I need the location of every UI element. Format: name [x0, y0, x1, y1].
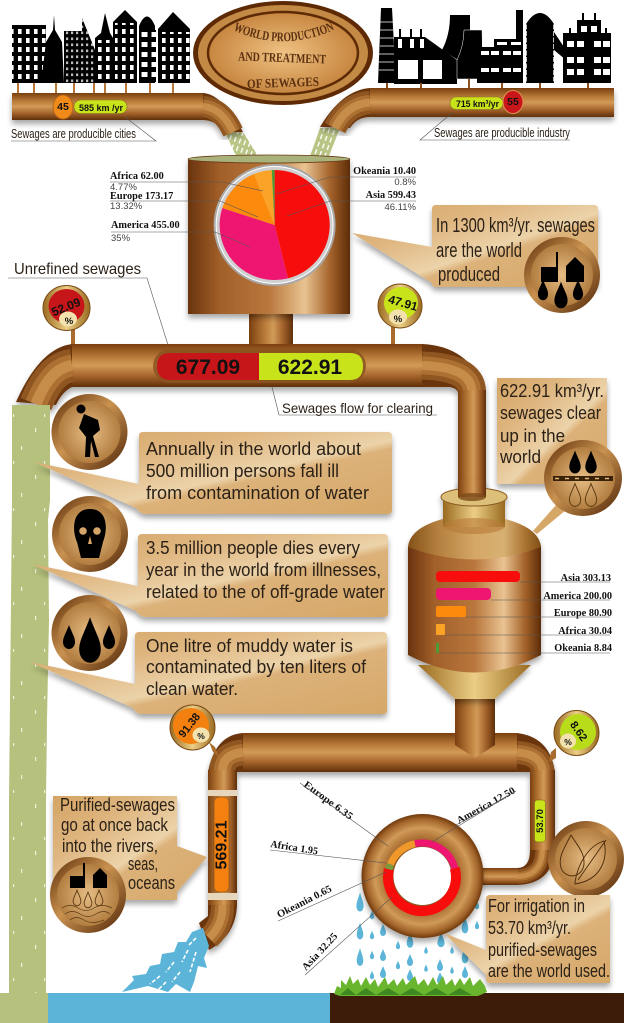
pie labels: left: America 455.00 [111, 220, 180, 231]
sewage streams into tank [225, 128, 340, 156]
flow readout: 622.91 [278, 356, 342, 379]
pie labels: left: Africa 62.00 [110, 171, 164, 182]
badge: industry share: 55 [507, 96, 519, 108]
caption: flow for clearing [272, 387, 437, 416]
badge: industry share: 715 km³/yr [456, 99, 499, 110]
bar labels: Okeania 8.84 [554, 643, 612, 654]
callout: purified sewages: seas, [128, 853, 158, 874]
badge: cities share: 45 [57, 101, 69, 113]
icon: skull [52, 496, 128, 572]
pie labels: left [110, 171, 263, 247]
callout: muddy water: contaminated by ten liters of [146, 656, 367, 677]
grass [334, 976, 487, 996]
tank with pie chart [188, 155, 350, 314]
pipe: industry sewage [320, 88, 614, 128]
bar labels: Africa 30.04 [558, 626, 612, 637]
main pipe [16, 344, 486, 497]
pie labels: left: 13.32% [110, 201, 143, 212]
gauge: 91.38 percent: 91.38 [177, 711, 203, 740]
caption: industry [420, 112, 570, 140]
pie labels: right: 46.11% [384, 202, 417, 213]
callout: illness [34, 432, 392, 514]
ring labels: America 12.50 [455, 785, 517, 827]
caption: flow for clearing: Sewages flow for clearing [282, 400, 433, 416]
ring labels: Europe 6.35 [301, 780, 355, 823]
ring labels: Asia 32.25 [300, 931, 340, 973]
callout: 622.91 km3: up in the [500, 425, 565, 446]
title badge [193, 1, 373, 105]
badge: 53.70: 53.70 [535, 809, 546, 833]
gauge: 47.91 percent: 47.91 [387, 292, 420, 314]
callout: purified sewages: oceans [128, 872, 175, 893]
callout: 1300 km3: produced [438, 264, 500, 286]
caption: industry: Sewages are producible industry [434, 125, 570, 140]
badge: industry share [450, 90, 523, 114]
gauge: 47.91 percent: % [394, 314, 403, 325]
callout: muddy water [30, 632, 387, 714]
callout: irrigation: 53.70 km³/yr. [488, 917, 571, 938]
bar chart [436, 571, 520, 653]
lower pipes [199, 733, 555, 950]
ring labels: Okeania 0.65 [275, 884, 334, 921]
callout: muddy water: One litre of muddy water is [146, 635, 353, 656]
icon: filter drops [533, 440, 622, 534]
bar labels: Asia 303.13 [561, 573, 611, 584]
callout: muddy water: clean water. [146, 678, 238, 699]
water drops [356, 892, 479, 984]
badge: 569.21 [208, 790, 237, 900]
flow readout [153, 349, 366, 383]
title text: AND TREATMENT [238, 48, 327, 67]
callout: illness: from contamination of water [146, 482, 369, 503]
pie labels: right: Okeania 10.40 [353, 166, 416, 177]
callout: 1300 km3: are the world [436, 240, 522, 262]
filter vessel with bar chart [408, 480, 541, 699]
gauge: 91.38 percent: % [197, 731, 205, 741]
callout: irrigation: For irrigation in [488, 895, 585, 916]
bar labels [439, 573, 612, 654]
badge: 53.70 [534, 800, 546, 842]
contaminated stream [9, 405, 50, 993]
ring tank with donut chart [362, 814, 484, 938]
title text: OF SEWAGES [247, 74, 319, 91]
pie labels: right [276, 166, 417, 216]
bar labels: Europe 80.90 [554, 608, 612, 619]
callout: 622.91 km3: world [499, 446, 541, 467]
title text [236, 22, 334, 91]
caption: cities [11, 117, 156, 141]
callout: purified sewages: go at once back [61, 814, 169, 835]
callout: 622.91 km3: sewages clear [500, 402, 601, 423]
ring labels [270, 780, 517, 975]
title text: WORLD PRODUCTION [236, 22, 334, 42]
ring labels: Africa 1.95 [270, 839, 319, 857]
callout: irrigation: purified-sewages [488, 939, 597, 960]
callout: 1300 km3 [352, 205, 600, 313]
callout: illness: 500 million persons fall ill [146, 460, 339, 481]
pipe: cities sewage [12, 93, 243, 132]
callout: purified sewages: into the rivers, [62, 835, 158, 856]
callout: illness: Annually in the world about [146, 438, 361, 459]
illustration: factories [378, 8, 611, 89]
callout: deaths: year in the world from illnesses, [146, 559, 381, 580]
callout: irrigation [444, 895, 610, 983]
gauge: 47.91 percent [378, 284, 422, 346]
gauge: 8.62 percent: 8.62 [567, 719, 589, 744]
splash of water [122, 928, 209, 992]
connector pipe below tank [249, 310, 293, 348]
donut chart [388, 843, 456, 911]
icon: sick person [52, 394, 128, 470]
badge: cities share [53, 95, 127, 119]
pie labels: right: 0.8% [394, 177, 417, 188]
gauge: 52.09 percent: 52.09 [49, 295, 83, 319]
pie labels: left: Europe 173.17 [110, 191, 173, 202]
pie labels: right: Asia 599.43 [366, 190, 416, 201]
pie labels: left: 4.77% [110, 182, 137, 193]
caption: cities: Sewages are producible cities [11, 126, 136, 141]
label: unrefined sewages [8, 261, 168, 345]
pie labels: left: 35% [111, 233, 131, 244]
gauge: 8.62 percent: % [564, 737, 572, 747]
icon: factory and waves [50, 857, 126, 933]
gauge: 8.62 percent [549, 710, 599, 762]
icon: drops [52, 595, 128, 671]
gauge: 52.09 percent: % [65, 316, 74, 327]
gauge: 91.38 percent [170, 705, 219, 757]
pipe from filter [455, 695, 495, 758]
illustration: city skyline [12, 10, 190, 93]
callout: deaths: related to the of off-grade water [146, 581, 385, 602]
icon: drop and leaf [548, 821, 624, 897]
callout: purified sewages: Purified-sewages [60, 794, 175, 815]
ground: sediment, water and soil [0, 993, 624, 1023]
badge: cities share: 585 km /yr [79, 103, 123, 114]
flow readout: 677.09 [176, 356, 240, 379]
gauge: 52.09 percent [43, 286, 90, 346]
callout: deaths [32, 534, 388, 617]
callout: 622.91 km3 [497, 378, 607, 484]
callout: 622.91 km3: 622.91 km³/yr. [500, 380, 604, 401]
badge: 569.21: 569.21 [214, 820, 230, 869]
bar labels: America 200.00 [543, 591, 612, 602]
callout: purified sewages [50, 794, 207, 933]
icon: factory and drops [524, 237, 600, 313]
label: unrefined sewages: Unrefined sewages [14, 261, 141, 278]
callout: deaths: 3.5 million people dies every [146, 537, 361, 558]
pie chart [215, 165, 335, 285]
